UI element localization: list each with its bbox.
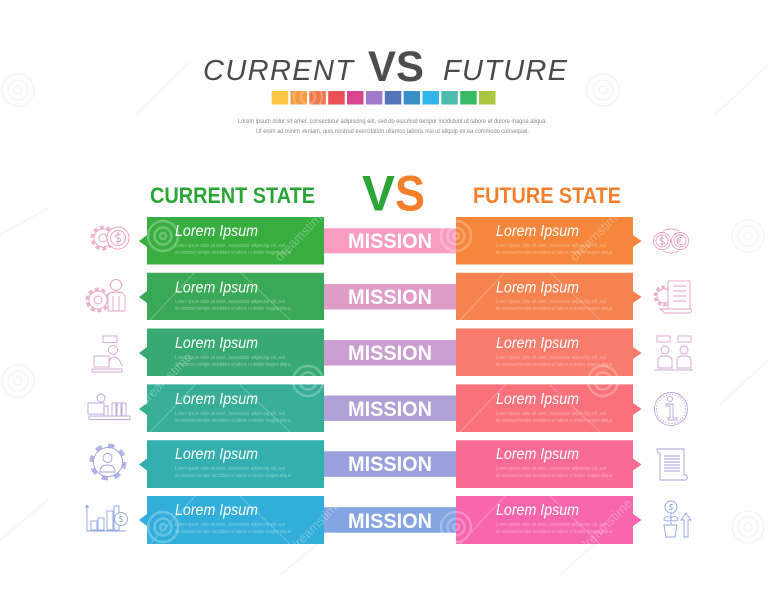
panel: current row 2: Lorem ipsum dolor sit amet, consectetur adipiscing elit, sed — [175, 299, 285, 305]
intro text: Ut enim ad minim veniam, quis nostrud exercitation ullamco laboris nisi ut aliquip ex ea commodo consequat. — [256, 128, 529, 135]
panel: future row 3: Lorem ipsum dolor sit amet, consectetur adipiscing elit, sed — [496, 355, 606, 361]
panel: current row 2 — [139, 273, 324, 320]
colour swatches — [272, 91, 496, 104]
panel: current row 1: Lorem ipsum dolor sit amet, consectetur adipiscing elit, sed — [175, 243, 285, 249]
panel: current row 1: do eiusmod tempor incididunt ut labore et dolore magna aliqua — [175, 250, 291, 256]
panel: current row 5: do eiusmod tempor incididunt ut labore et dolore magna aliqua — [175, 473, 291, 479]
icon: person at computer — [92, 336, 122, 372]
heading: future state: FUTURE STATE — [473, 183, 621, 208]
panel: current row 5 — [139, 440, 324, 488]
dreamstime watermark text: dreamstime — [577, 495, 635, 554]
icon: gear and dollar coin — [92, 227, 129, 249]
mission bars: MISSION — [348, 510, 432, 533]
panel: current row 4: do eiusmod tempor incididunt ut labore et dolore magna aliqua — [175, 418, 291, 424]
panel: current row 3: Lorem Ipsum — [175, 335, 258, 352]
panel: future row 5: do eiusmod tempor incididunt ut labore et dolore magna aliqua — [496, 473, 612, 479]
panel: future row 5 — [456, 440, 642, 488]
intro text — [238, 118, 547, 135]
panel: future row 5: Lorem Ipsum — [496, 446, 579, 463]
panel: future row 1: do eiusmod tempor incididunt ut labore et dolore magna aliqua — [496, 250, 612, 256]
icon: information coin — [654, 392, 688, 426]
panel: future row 6: Lorem Ipsum — [496, 502, 579, 519]
icon: office desk — [88, 394, 130, 420]
panel: future row 1 — [456, 217, 642, 264]
panel: future row 6 — [456, 496, 642, 544]
icon: dollar and euro coins — [654, 229, 688, 253]
panel: future row 3: do eiusmod tempor incididunt ut labore et dolore magna aliqua — [496, 362, 612, 368]
panel: current row 5: Lorem Ipsum — [175, 446, 258, 463]
mission bars: MISSION — [348, 453, 432, 476]
heading: center VS: V — [362, 166, 396, 222]
icon: money plant with arrows — [664, 501, 691, 537]
intro text: Lorem ipsum dolor sit amet, consectetur adipiscing elit, sed do eiusmod tempor incididunt ut labore et dolore magna aliqua. — [238, 118, 547, 125]
panel: current row 4: Lorem Ipsum — [175, 391, 258, 408]
panel: future row 2: Lorem Ipsum — [496, 280, 579, 296]
dreamstime watermark text: dreamstime — [137, 349, 195, 408]
panel: future row 6: Lorem ipsum dolor sit amet, consectetur adipiscing elit, sed — [496, 522, 606, 528]
icon: gear with person — [92, 446, 124, 478]
dreamstime watermark text: dreamstime — [287, 495, 345, 554]
mission bars: MISSION — [348, 230, 432, 253]
icon: person with gear — [87, 280, 125, 311]
panel watermarks — [148, 83, 618, 544]
panel: future row 4: Lorem ipsum dolor sit amet, consectetur adipiscing elit, sed — [496, 411, 606, 417]
heading: current state: CURRENT STATE — [150, 183, 315, 208]
panel: future row 4: Lorem Ipsum — [496, 391, 579, 408]
icon: two people with signs — [654, 336, 693, 370]
panel: current row 6: Lorem Ipsum — [175, 502, 258, 519]
title: CURRENT — [203, 55, 355, 87]
panel: future row 2 — [456, 273, 642, 320]
panel: future row 1: Lorem ipsum dolor sit amet, consectetur adipiscing elit, sed — [496, 243, 606, 249]
panel: current row 6 — [139, 496, 324, 544]
panel: current row 3: Lorem ipsum dolor sit amet, consectetur adipiscing elit, sed — [175, 355, 285, 361]
dreamstime watermark text — [137, 205, 635, 554]
panel: future row 4: do eiusmod tempor incididunt ut labore et dolore magna aliqua — [496, 418, 612, 424]
heading: center VS — [362, 166, 425, 222]
mission bars: MISSION — [348, 342, 432, 365]
heading: center VS: S — [395, 166, 425, 222]
panel: current row 4 — [139, 384, 324, 432]
panel: current row 1: Lorem Ipsum — [175, 223, 258, 240]
dreamstime watermark text: dreamstime — [272, 205, 330, 264]
panel: current row 6: do eiusmod tempor incididunt ut labore et dolore magna aliqua — [175, 529, 291, 535]
panel: current row 1 — [139, 217, 324, 264]
panel: current row 3: do eiusmod tempor incididunt ut labore et dolore magna aliqua — [175, 362, 291, 368]
title: VS — [368, 43, 424, 91]
icon: bar chart and coin — [86, 505, 128, 531]
panel: future row 2: Lorem ipsum dolor sit amet, consectetur adipiscing elit, sed — [496, 299, 606, 305]
icon: gear and checklist — [655, 281, 692, 313]
panel: future row 3: Lorem Ipsum — [496, 335, 579, 352]
panel: future row 1: Lorem Ipsum — [496, 223, 579, 240]
panel: future row 2: do eiusmod tempor incididunt ut labore et dolore magna aliqua — [496, 306, 612, 312]
panel: current row 2: do eiusmod tempor incididunt ut labore et dolore magna aliqua — [175, 306, 291, 312]
dreamstime watermark text: dreamstime — [567, 205, 625, 264]
title — [203, 43, 568, 91]
panel: current row 4: Lorem ipsum dolor sit amet, consectetur adipiscing elit, sed — [175, 411, 285, 417]
mission bars: MISSION — [348, 398, 432, 421]
panel: current row 5: Lorem ipsum dolor sit amet, consectetur adipiscing elit, sed — [175, 466, 285, 472]
panel: future row 5: Lorem ipsum dolor sit amet, consectetur adipiscing elit, sed — [496, 466, 606, 472]
panel: current row 3 — [139, 328, 324, 376]
panel: current row 2: Lorem Ipsum — [175, 280, 258, 296]
title: FUTURE — [443, 55, 568, 87]
mission bars: MISSION — [348, 286, 432, 309]
panel: future row 6: do eiusmod tempor incididunt ut labore et dolore magna aliqua — [496, 529, 612, 535]
icon: scroll document — [657, 449, 688, 480]
mission bars — [324, 228, 456, 533]
panel: current row 6: Lorem ipsum dolor sit amet, consectetur adipiscing elit, sed — [175, 522, 285, 528]
panel: future row 4 — [456, 384, 642, 432]
panel: future row 3 — [456, 328, 642, 376]
